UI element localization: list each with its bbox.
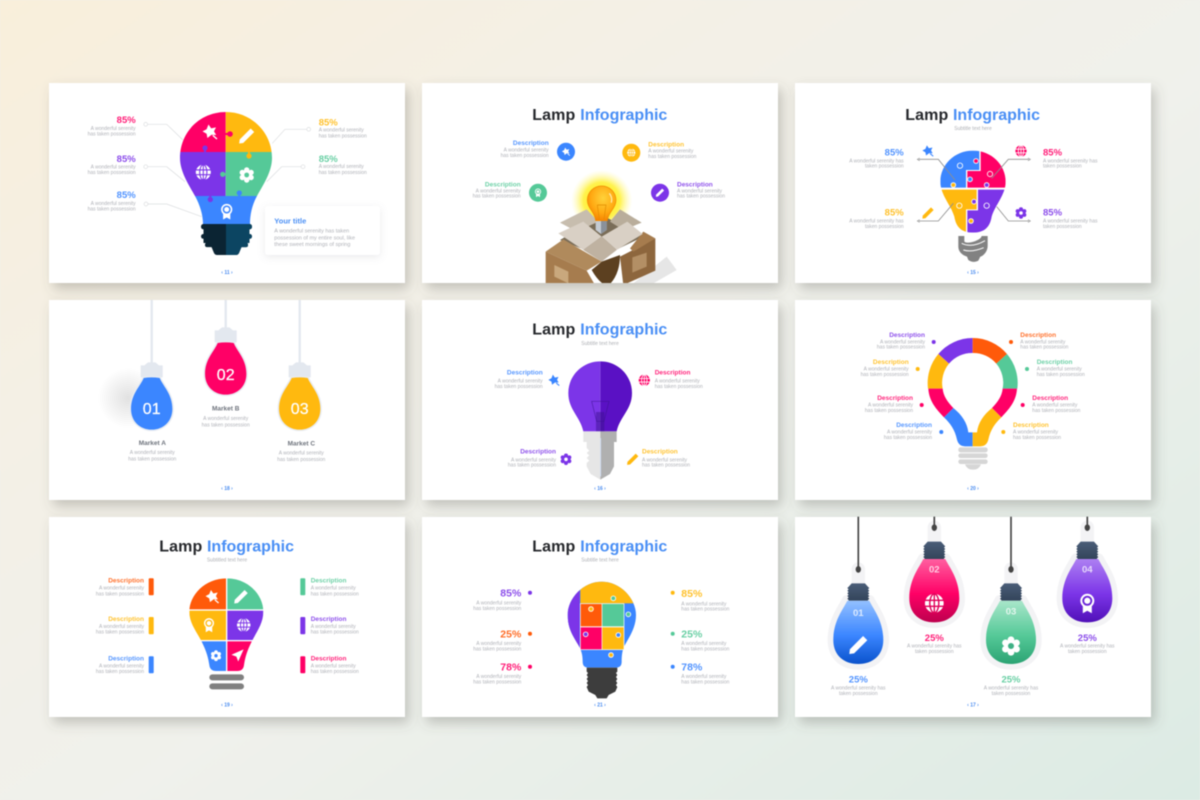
- callouts: taken possession: [915, 649, 954, 655]
- descriptions: A wonderful serenity: [648, 149, 694, 155]
- descriptions: Description: [108, 578, 144, 585]
- callouts: 85%: [319, 118, 338, 129]
- callouts: 85%: [319, 154, 338, 165]
- icon: blue badge: [557, 143, 575, 161]
- callouts: 85%: [885, 208, 904, 219]
- segmented bulb: [187, 577, 267, 689]
- panel: slide 17 gradient hanging lamps: [795, 517, 1151, 717]
- callouts: 85%: [1043, 147, 1063, 158]
- descriptions: Description: [485, 181, 521, 188]
- callouts: taken possession: [1043, 164, 1082, 170]
- icons: [204, 590, 250, 662]
- descriptions: [96, 578, 359, 675]
- callouts: taken possession: [839, 691, 878, 697]
- descriptions: Description: [1013, 422, 1049, 429]
- descriptions: has taken possession: [96, 630, 144, 636]
- callouts: 25%: [681, 628, 703, 640]
- title: Subtitle text here: [581, 558, 619, 564]
- lamp base: [958, 236, 988, 262]
- puzzle grid bulb: [567, 580, 639, 698]
- page number: ‹ 11 ›: [221, 270, 233, 276]
- callouts: 85%: [117, 154, 136, 165]
- descriptions: Description: [873, 359, 909, 366]
- card: your title: these sweet mornings of spring: [274, 242, 350, 248]
- descriptions: has taken possession: [677, 194, 725, 200]
- title: Infographic: [580, 322, 667, 339]
- callouts: has taken possession: [88, 206, 136, 212]
- callouts: 25%: [925, 633, 944, 644]
- panel: slide 18 hanging lamps: [49, 300, 405, 500]
- callouts: A wonderful serenity: [476, 641, 522, 647]
- descriptions: Description: [648, 141, 684, 148]
- descriptions: has taken possession: [311, 669, 359, 675]
- callouts: A wonderful serenity has: [984, 686, 1039, 692]
- title: Infographic: [580, 107, 667, 124]
- icon: purple badge: [651, 184, 669, 202]
- descriptions: A wonderful serenity: [655, 378, 700, 384]
- descriptions: A wonderful serenity: [642, 457, 688, 463]
- icons: [922, 145, 1027, 219]
- descriptions: A wonderful serenity: [677, 188, 723, 194]
- panel: slide 16 purple lamp: [422, 300, 778, 500]
- descriptions: Description: [655, 370, 690, 377]
- callouts: taken possession: [865, 224, 904, 230]
- descriptions: A wonderful serenity: [311, 664, 356, 670]
- marker dots: [528, 591, 675, 669]
- descriptions: has taken possession: [1032, 408, 1081, 414]
- callouts: taken possession: [1043, 224, 1082, 230]
- callouts: A wonderful serenity: [681, 674, 727, 680]
- lamp 03: 03: [291, 401, 309, 418]
- callouts: 25%: [1001, 675, 1021, 686]
- callouts: 25%: [500, 628, 522, 640]
- callouts: 85%: [500, 588, 522, 600]
- labels: A wonderful serenity: [203, 416, 249, 422]
- descriptions: Description: [642, 448, 678, 455]
- descriptions: has taken possession: [1020, 345, 1069, 351]
- callouts: has taken possession: [473, 606, 522, 612]
- descriptions: Description: [520, 448, 556, 455]
- jigsaw bulb: [938, 148, 1008, 235]
- descriptions: has taken possession: [642, 463, 690, 469]
- card: your title: Your title: [274, 216, 306, 225]
- callouts: taken possession: [992, 691, 1031, 697]
- labels: Market C: [288, 441, 315, 448]
- descriptions: A wonderful serenity: [1013, 430, 1059, 436]
- descriptions: A wonderful serenity: [504, 148, 549, 154]
- descriptions: A wonderful serenity: [498, 378, 543, 384]
- callouts: A wonderful serenity has: [1060, 644, 1115, 650]
- descriptions: has taken possession: [884, 435, 932, 441]
- icon: green badge: [529, 184, 547, 202]
- descriptions: A wonderful serenity: [311, 586, 356, 592]
- page number: ‹ 19 ›: [221, 703, 233, 709]
- descriptions: has taken possession: [311, 630, 359, 636]
- callouts: A wonderful serenity: [91, 126, 136, 132]
- title: [532, 107, 667, 124]
- callouts: has taken possession: [681, 647, 730, 653]
- title: Infographic: [580, 539, 667, 556]
- callouts: has taken possession: [88, 132, 136, 138]
- lamp 02: 02: [217, 367, 235, 384]
- descriptions: A wonderful serenity: [311, 624, 356, 630]
- purple bulb: [568, 361, 632, 480]
- callouts: A wonderful serenity: [681, 641, 727, 647]
- callouts: [473, 588, 730, 686]
- callouts: has taken possession: [681, 680, 730, 686]
- callouts: has taken possession: [473, 647, 522, 653]
- descriptions: Description: [677, 181, 713, 188]
- callouts: A wonderful serenity has: [849, 219, 904, 225]
- labels: Market A: [139, 440, 166, 447]
- callouts: 85%: [117, 115, 136, 126]
- callouts: A wonderful serenity: [476, 674, 522, 680]
- color bars: [149, 578, 305, 673]
- panel: slide 11 puzzle bulb with card: [49, 83, 405, 283]
- lamp 04: [1062, 517, 1112, 622]
- descriptions: Description: [889, 332, 925, 339]
- callouts: has taken possession: [473, 680, 522, 686]
- title: [905, 107, 1040, 132]
- labels: A wonderful serenity: [130, 450, 175, 456]
- labels: has taken possession: [202, 422, 250, 428]
- descriptions: A wonderful serenity: [99, 586, 144, 592]
- page number: ‹ 21 ›: [594, 703, 606, 709]
- callouts: 78%: [500, 661, 522, 673]
- callouts: A wonderful serenity has: [849, 158, 904, 164]
- callouts: 85%: [681, 588, 703, 600]
- title: Subtitle text here: [954, 126, 992, 132]
- descriptions: has taken possession: [861, 372, 909, 378]
- descriptions: has taken possession: [96, 591, 144, 597]
- callouts: [849, 147, 1098, 230]
- descriptions: A wonderful serenity: [864, 367, 909, 373]
- panel: slide box with glowing lamp: [422, 83, 778, 285]
- descriptions: has taken possession: [648, 154, 697, 160]
- descriptions: Description: [507, 370, 543, 377]
- descriptions: has taken possession: [865, 408, 913, 414]
- callouts: 85%: [1043, 208, 1063, 219]
- marker dots: [916, 340, 1029, 434]
- callouts: has taken possession: [319, 170, 367, 176]
- descriptions: Description: [311, 578, 346, 585]
- title: Subtitled text here: [207, 558, 247, 564]
- lamp 01: [131, 300, 172, 430]
- descriptions: has taken possession: [508, 463, 556, 469]
- card: your title: [265, 206, 380, 255]
- lamp 03: 03: [1006, 606, 1016, 617]
- title: Lamp: [532, 539, 576, 556]
- callouts: has taken possession: [681, 607, 730, 613]
- lamp 02: 02: [929, 565, 940, 576]
- title: [532, 322, 667, 347]
- page number: ‹ 18 ›: [221, 486, 233, 492]
- icon: yellow badge: [622, 144, 640, 162]
- descriptions: [495, 370, 703, 469]
- descriptions: A wonderful serenity: [887, 430, 932, 436]
- descriptions: A wonderful serenity: [880, 340, 925, 346]
- page number: ‹ 20 ›: [967, 486, 979, 492]
- labels: Market B: [212, 406, 240, 413]
- callouts: taken possession: [865, 164, 904, 170]
- descriptions: A wonderful serenity: [99, 664, 144, 670]
- lamp 03: [986, 517, 1036, 664]
- labels: has taken possession: [128, 456, 177, 462]
- descriptions: A wonderful serenity: [99, 624, 144, 630]
- lamp 04: 04: [1082, 565, 1093, 576]
- callouts: 85%: [885, 147, 904, 158]
- arrows: [917, 158, 1030, 222]
- descriptions: Description: [1020, 332, 1056, 339]
- labels: [128, 406, 326, 463]
- descriptions: A wonderful serenity: [1020, 340, 1066, 346]
- callouts: A wonderful serenity: [681, 601, 727, 607]
- title: Subtitle text here: [581, 341, 619, 347]
- descriptions: has taken possession: [501, 153, 549, 159]
- callouts: has taken possession: [319, 134, 367, 140]
- callouts: A wonderful serenity has: [1043, 219, 1098, 225]
- callouts: A wonderful serenity has: [1043, 158, 1098, 164]
- lamp 02: [909, 517, 959, 622]
- descriptions: A wonderful serenity: [868, 403, 913, 409]
- page number: ‹ 15 ›: [967, 270, 979, 276]
- page number: ‹ 17 ›: [967, 703, 979, 709]
- panel: slide 19 segmented bulb: [49, 517, 405, 717]
- icons: [548, 375, 650, 465]
- callouts: 85%: [117, 190, 136, 201]
- callouts: A wonderful serenity: [91, 201, 136, 207]
- ring bulb: [928, 338, 1018, 470]
- descriptions: A wonderful serenity: [1037, 367, 1082, 373]
- descriptions: Description: [513, 140, 549, 147]
- puzzle bulb: [179, 111, 273, 256]
- callouts: A wonderful serenity: [476, 600, 522, 606]
- labels: A wonderful serenity: [279, 451, 324, 457]
- descriptions: Description: [1037, 359, 1072, 366]
- callouts: has taken possession: [88, 170, 136, 176]
- descriptions: Description: [311, 616, 346, 623]
- callouts: A wonderful serenity has: [831, 686, 886, 692]
- callouts: A wonderful serenity has: [907, 644, 962, 650]
- callouts: A wonderful serenity: [91, 164, 136, 170]
- callouts: A wonderful serenity: [319, 164, 364, 170]
- title: Lamp: [905, 107, 949, 124]
- descriptions: Description: [311, 656, 346, 663]
- title: Infographic: [207, 539, 294, 556]
- descriptions: Description: [896, 422, 932, 429]
- callouts: [88, 115, 367, 212]
- descriptions: Description: [108, 616, 144, 623]
- card: your title: A wonderful serenity has taken: [274, 229, 349, 235]
- descriptions: A wonderful serenity: [511, 457, 556, 463]
- soft shadow: [98, 368, 158, 428]
- descriptions: has taken possession: [473, 194, 521, 200]
- descriptions: has taken possession: [655, 384, 703, 390]
- lamp 01: [833, 517, 883, 664]
- callouts: 25%: [1078, 633, 1097, 644]
- title: [159, 539, 294, 564]
- panel: slide 20 ring bulb: [795, 300, 1151, 500]
- descriptions: A wonderful serenity: [476, 188, 521, 194]
- descriptions: Description: [108, 656, 144, 663]
- descriptions: A wonderful serenity: [1032, 403, 1078, 409]
- descriptions: has taken possession: [311, 591, 359, 597]
- descriptions: has taken possession: [495, 384, 543, 390]
- labels: has taken possession: [277, 457, 326, 463]
- title: Infographic: [953, 107, 1040, 124]
- lamp 02: [205, 300, 246, 395]
- lamp 03: [279, 300, 320, 430]
- callouts: A wonderful serenity: [319, 128, 364, 134]
- panel: slide 21 puzzle grid bulb: [422, 517, 778, 717]
- title: Lamp: [159, 539, 203, 556]
- panel: slide 15 jigsaw bulb: [795, 83, 1151, 283]
- callouts: taken possession: [1068, 649, 1107, 655]
- title: Lamp: [532, 107, 576, 124]
- descriptions: has taken possession: [877, 345, 925, 351]
- descriptions: Description: [1032, 395, 1068, 402]
- descriptions: Description: [877, 395, 913, 402]
- title: Lamp: [532, 322, 576, 339]
- callouts: 78%: [681, 661, 703, 673]
- callouts: 25%: [849, 675, 868, 686]
- card: your title: possession of my entire soul, like: [274, 235, 355, 241]
- descriptions: has taken possession: [1013, 435, 1061, 441]
- connector lines: [144, 122, 311, 217]
- descriptions: has taken possession: [1037, 372, 1085, 378]
- descriptions: [861, 332, 1085, 441]
- lamp 01: 01: [853, 608, 864, 619]
- lamp 01: 01: [143, 401, 161, 418]
- descriptions: has taken possession: [96, 669, 144, 675]
- title: [532, 539, 667, 564]
- descriptions: [473, 140, 725, 200]
- box illustration: [546, 170, 677, 285]
- callouts: [831, 633, 1115, 697]
- page number: ‹ 16 ›: [594, 486, 606, 492]
